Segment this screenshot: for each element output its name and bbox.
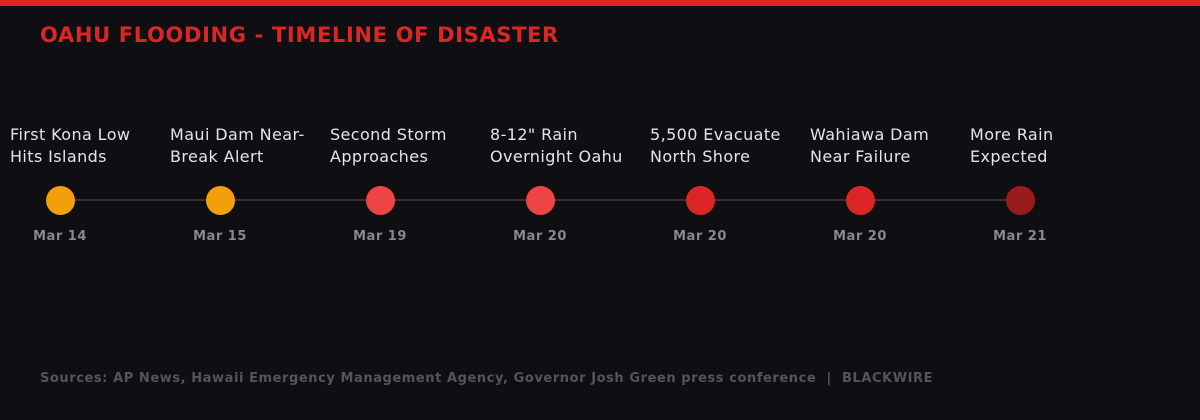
event: Mar 15: Break Alert [170,147,264,166]
event: Mar 20 evacuate: 5,500 Evacuate [650,125,781,144]
event: Mar 15: Mar 15 [193,229,247,244]
event: Mar 20 evacuate [650,125,781,244]
event: Mar 19: Approaches [330,147,428,166]
event: Mar 14: Hits Islands [10,147,107,166]
event: Mar 21: More Rain [970,125,1054,144]
event: Mar 20 rain: Mar 20 [513,229,567,244]
event: Mar 14: First Kona Low [10,125,130,144]
event: Mar 20 dam: Wahiawa Dam [810,125,929,144]
event: Mar 14: Mar 14 [33,229,87,244]
event: Mar 15 [170,125,305,244]
event: Mar 20 rain [490,125,623,244]
event: Mar 20 dam: Near Failure [810,147,911,166]
event: Mar 19: Mar 19 [353,229,407,244]
event: Mar 20 dam: Mar 20 [833,229,887,244]
event: Mar 21 [970,125,1054,244]
event: Mar 21: Expected [970,147,1048,166]
event: Mar 20 rain: Overnight Oahu [490,147,623,166]
event: Mar 20 rain: 8-12" Rain [490,125,578,144]
sources: Sources: AP News, Hawaii Emergency Management Agency, Governor Josh Green press conference | BLACKWIRE [40,371,933,386]
event: Mar 14 [10,125,130,244]
event: Mar 21: Mar 21 [993,229,1047,244]
event: Mar 15: Maui Dam Near- [170,125,305,144]
event: Mar 19: Second Storm [330,125,447,144]
event: Mar 20 evacuate: Mar 20 [673,229,727,244]
event: Mar 19 [330,125,447,244]
event: Mar 20 evacuate: North Shore [650,147,750,166]
event: Mar 20 dam [810,125,929,244]
title: OAHU FLOODING - TIMELINE OF DISASTER [40,23,559,47]
